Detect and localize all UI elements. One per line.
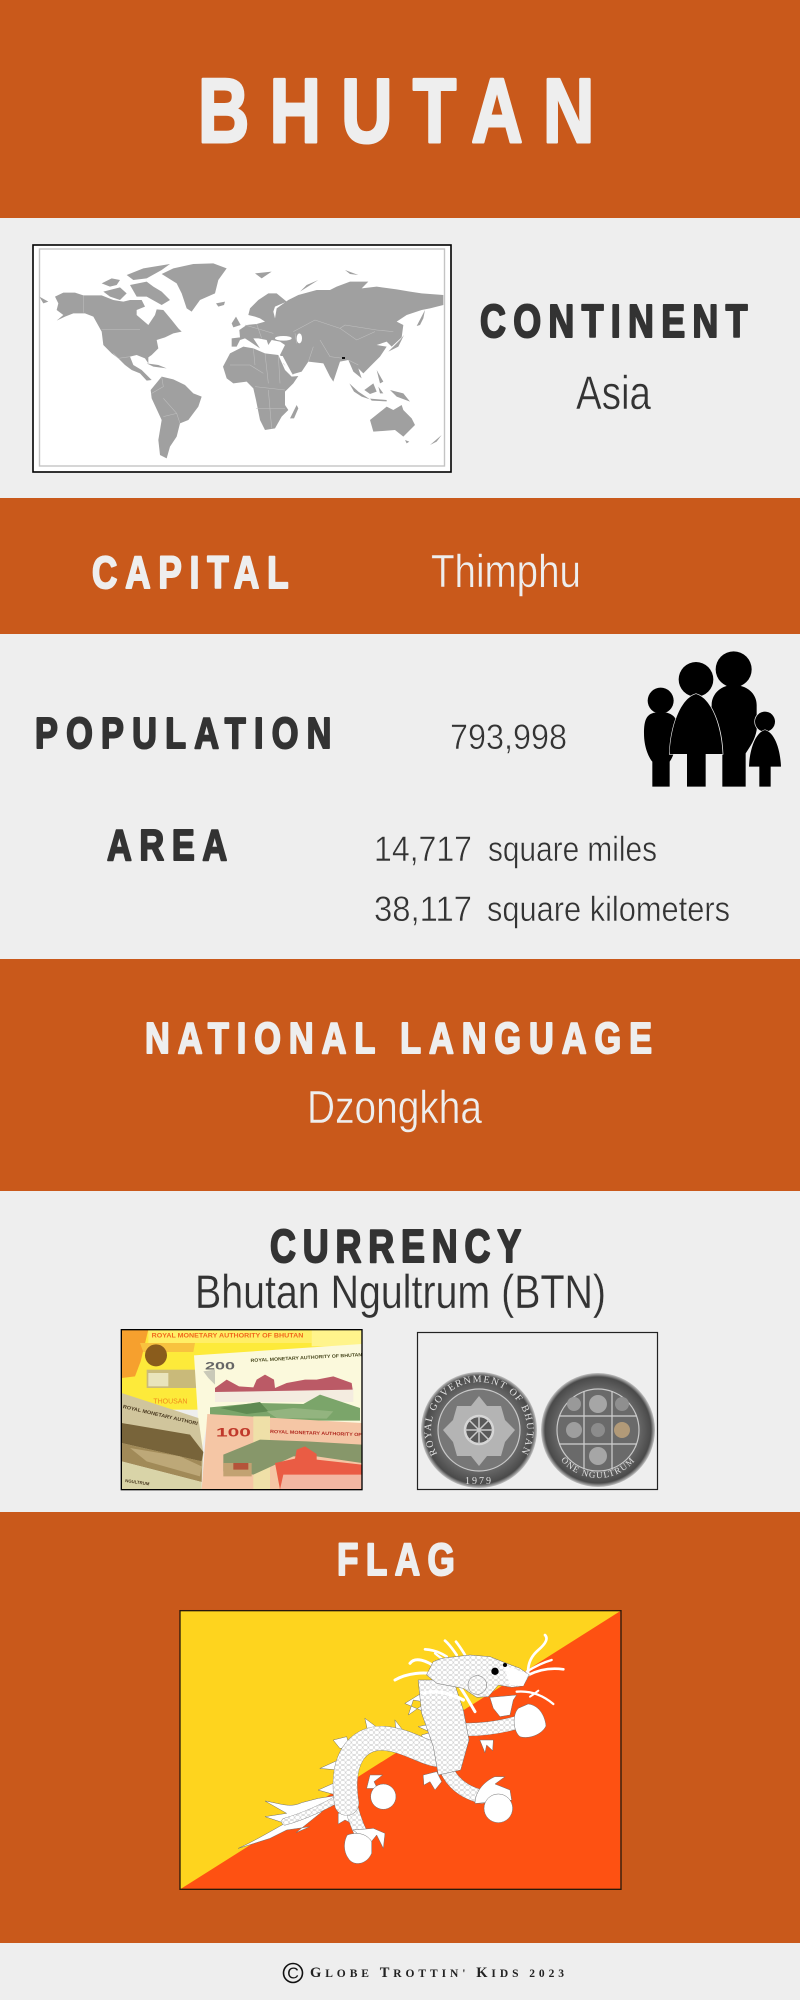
photo: banknotes: THOUSAN [153,1398,187,1405]
heading: continent: CONTINENT [480,296,748,347]
value: currency: Bhutan Ngultrum (BTN) [195,1265,606,1318]
dragon body [285,1680,517,1835]
value: population: 793,998 [450,718,567,757]
panel: title band [0,0,800,218]
value: area in kilometers: square kilometers [487,890,730,929]
heading: population: POPULATION [35,709,331,758]
dragon pearls and claws [344,1704,546,1864]
icon: family [644,651,781,787]
photo: banknotes: ROYAL MONETARY AUTHORITY OF BHUTAN [250,1352,363,1363]
value: area in kilometers [374,890,730,929]
coin: obverse [421,1372,537,1488]
value: area in miles: square miles [488,830,657,869]
photo: banknotes: 100 [216,1425,252,1439]
panel: national language band [0,959,800,1191]
heading: national language: NATIONAL LANGUAGE [145,1014,652,1063]
world map [33,245,451,472]
photo: banknotes: ROYAL MONETARY AUTHORI [122,1404,199,1427]
footer: copyright: G LOBE T ROTTIN' K IDS 2023 [310,1965,564,1981]
value: continent: Asia [576,366,652,419]
heading: currency: CURRENCY [270,1221,521,1272]
photo: banknotes: ROYAL MONETARY AUTHORITY OF BHUTAN [152,1333,303,1339]
photo: banknotes: 200 [205,1361,235,1373]
dragon head and whiskers [395,1635,563,1712]
photo: banknotes: ROYAL MONETARY AUTHORITY OF [270,1429,362,1437]
heading: flag: FLAG [337,1534,455,1585]
coin: reverse: ONE NGULTRUM [562,1457,634,1478]
photo: coins [416,1332,658,1490]
value: area in miles: 14,717 [374,830,472,869]
footer: copyright: C [287,1966,299,1982]
panel: continent [33,245,748,472]
heading: area: AREA [107,821,227,870]
flag of Bhutan [180,1611,621,1889]
panel: currency [120,1221,658,1490]
photo: banknotes: NGULTRUM [125,1478,150,1486]
coin: reverse [541,1373,655,1487]
value: area in miles [374,830,657,869]
panel: capital band [0,498,800,634]
panel: flag band [0,1512,800,1943]
photo: banknotes [121,1330,363,1490]
value: language: Dzongkha [307,1081,482,1133]
map marker: Bhutan [342,357,345,359]
coin: obverse: 1979 [465,1476,493,1487]
heading: capital: CAPITAL [92,547,289,598]
panel: population and area [35,651,781,929]
coin: obverse: ROYAL GOVERNMENT OF BHUTAN [424,1376,534,1457]
value: area in kilometers: 38,117 [374,890,472,929]
title: BHUTAN [198,61,594,162]
value: capital: Thimphu [431,545,581,597]
dragon [238,1635,563,1864]
